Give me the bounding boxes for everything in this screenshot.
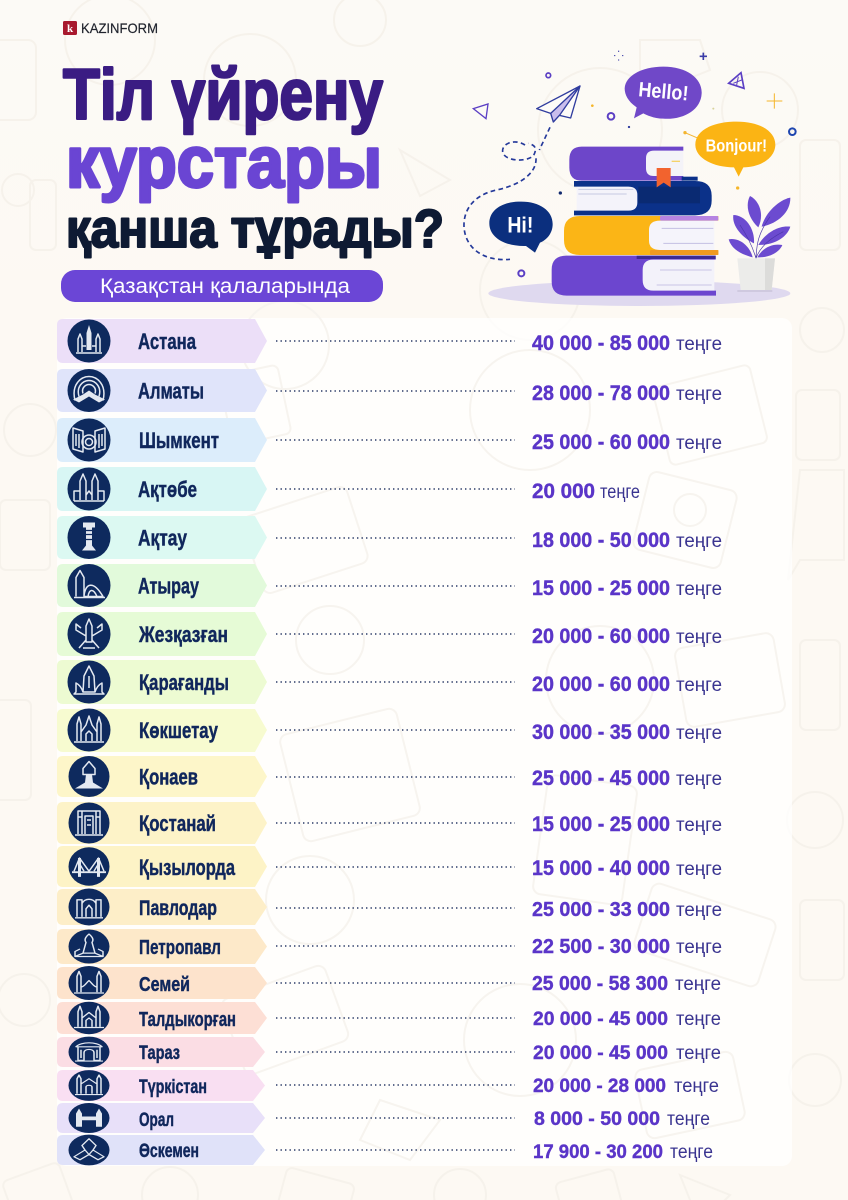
row: Петропавл: теңге bbox=[676, 937, 722, 958]
row: Қонаев: теңге bbox=[676, 769, 722, 790]
row: Павлодар: теңге bbox=[676, 900, 722, 921]
row: Өскемен: 17 900 - 30 200 bbox=[533, 1141, 663, 1163]
icon: Ақтөбе bbox=[68, 468, 110, 510]
icon: Тараз bbox=[68, 1037, 110, 1067]
bubble: Hello: Hello! bbox=[638, 78, 689, 105]
bubble: Bonjour: Bonjour! bbox=[706, 136, 767, 156]
title: Тіл үйрену bbox=[63, 56, 383, 135]
row: Атырау: теңге bbox=[676, 579, 722, 600]
row: Өскемен: теңге bbox=[670, 1142, 713, 1163]
decorative shapes bbox=[473, 73, 744, 119]
row: Шымкент: теңге bbox=[676, 433, 722, 454]
icon: Петропавл bbox=[68, 929, 110, 964]
bubble: Hello bbox=[625, 67, 702, 119]
row: Тараз: теңге bbox=[676, 1043, 721, 1064]
row: Талдыкорған: теңге bbox=[676, 1009, 721, 1030]
row: Ақтөбе: Ақтөбе bbox=[138, 477, 197, 502]
row: Астана bbox=[57, 319, 722, 363]
title: қанша тұрады? bbox=[66, 199, 444, 259]
row: Жезқазған: теңге bbox=[676, 627, 722, 648]
row: Қонаев: Қонаев bbox=[139, 764, 198, 790]
bookmark bbox=[657, 168, 671, 187]
icon: Қонаев bbox=[68, 756, 110, 797]
row: Астана: 40 000 - 85 000 bbox=[532, 332, 670, 355]
bubble: Hi bbox=[489, 202, 553, 253]
icon: Атырау bbox=[68, 564, 110, 607]
row: Жезқазған bbox=[57, 612, 722, 656]
row: Атырау: 15 000 - 25 000 bbox=[532, 577, 670, 600]
row: Көкшетау: 30 000 - 35 000 bbox=[532, 721, 670, 744]
illustration: books and speech bubbles bbox=[464, 51, 796, 306]
bubble: Bonjour bbox=[683, 122, 775, 177]
row: Қостанай bbox=[57, 802, 722, 844]
row: Қостанай: Қостанай bbox=[139, 811, 216, 836]
row: Ақтау: 18 000 - 50 000 bbox=[532, 529, 670, 552]
row: Алматы bbox=[57, 369, 722, 412]
row: Астана: Астана bbox=[138, 329, 197, 354]
row: Қонаев bbox=[57, 756, 722, 797]
row: Семей: Семей bbox=[139, 973, 190, 996]
title: курстары bbox=[66, 123, 382, 203]
icon: Семей bbox=[68, 966, 110, 1000]
row: Орал: Орал bbox=[139, 1109, 174, 1131]
icon: Көкшетау bbox=[68, 708, 110, 752]
row: Түркістан: 20 000 - 28 000 bbox=[533, 1075, 666, 1097]
book: top purple bbox=[569, 147, 698, 181]
row: Павлодар bbox=[57, 889, 722, 925]
row: Шымкент: Шымкент bbox=[139, 428, 219, 453]
row: Талдыкорған: Талдыкорған bbox=[139, 1009, 236, 1031]
row: Қызылорда: Қызылорда bbox=[139, 855, 236, 880]
icon: Қостанай bbox=[68, 802, 110, 844]
row: Петропавл bbox=[57, 929, 722, 964]
row: Түркістан: теңге bbox=[674, 1076, 719, 1097]
row: Қарағанды: 20 000 - 60 000 bbox=[532, 673, 670, 696]
bubble: Hi: Hi! bbox=[507, 212, 533, 237]
row: Орал: 8 000 - 50 000 bbox=[534, 1108, 660, 1130]
row: Қызылорда: 15 000 - 40 000 bbox=[532, 857, 670, 880]
icon: potted plant bbox=[729, 196, 790, 292]
row: Семей: 25 000 - 58 300 bbox=[532, 973, 668, 995]
row: Өскемен: Өскемен bbox=[139, 1141, 199, 1162]
row: Ақтөбе: 20 000 bbox=[532, 480, 595, 503]
subtitle pill: Қазақстан қалаларында bbox=[100, 275, 350, 298]
row: Ақтөбе: теңге bbox=[600, 482, 640, 503]
icon: Алматы bbox=[68, 369, 110, 412]
row: Алматы: 28 000 - 78 000 bbox=[532, 382, 670, 405]
row: Қонаев: 25 000 - 45 000 bbox=[532, 767, 670, 790]
icon: Түркістан bbox=[68, 1070, 110, 1101]
logo: Kazinform: KAZINFORM bbox=[81, 20, 158, 36]
row: Қызылорда: теңге bbox=[676, 859, 722, 880]
row: Ақтау: Ақтау bbox=[138, 526, 188, 550]
row: Тараз: Тараз bbox=[139, 1042, 180, 1064]
row: Көкшетау: теңге bbox=[676, 723, 722, 744]
row: Атырау bbox=[57, 564, 722, 607]
icon: Астана bbox=[68, 320, 110, 362]
row: Түркістан bbox=[57, 1070, 719, 1101]
row: Атырау: Атырау bbox=[138, 574, 200, 598]
book: yellow bbox=[564, 216, 718, 255]
row: Өскемен bbox=[57, 1135, 713, 1165]
row: Талдыкорған bbox=[57, 1002, 721, 1034]
row: Қарағанды: Қарағанды bbox=[139, 670, 229, 695]
dashed flight path bbox=[464, 127, 550, 260]
icon: Қызылорда bbox=[68, 847, 110, 886]
row: Қостанай: 15 000 - 25 000 bbox=[532, 813, 670, 836]
row: Алматы: теңге bbox=[676, 384, 722, 405]
row: Қостанай: теңге bbox=[676, 815, 722, 836]
row: Қызылорда bbox=[57, 846, 722, 887]
icon: Орал bbox=[68, 1103, 110, 1133]
row: Қарағанды bbox=[57, 660, 722, 704]
icon: Павлодар bbox=[68, 889, 110, 925]
icon: Өскемен bbox=[68, 1135, 110, 1165]
row: Ақтөбе bbox=[57, 467, 640, 511]
icon: Қарағанды bbox=[68, 660, 110, 704]
row: Тараз bbox=[57, 1037, 721, 1067]
subtitle pill bbox=[61, 270, 383, 302]
icon: Жезқазған bbox=[68, 612, 110, 656]
row: Тараз: 20 000 - 45 000 bbox=[533, 1042, 668, 1064]
row: Алматы: Алматы bbox=[138, 378, 204, 404]
row: Павлодар: Павлодар bbox=[139, 897, 217, 920]
icon: Шымкент bbox=[68, 418, 110, 462]
row: Жезқазған: 20 000 - 60 000 bbox=[532, 625, 670, 648]
icon: Талдыкорған bbox=[68, 1002, 110, 1034]
row: Шымкент: 25 000 - 60 000 bbox=[532, 431, 670, 454]
row: Түркістан: Түркістан bbox=[139, 1076, 207, 1098]
content backdrop panel bbox=[57, 301, 792, 1166]
icon: Ақтау bbox=[68, 516, 110, 559]
row: Орал bbox=[57, 1103, 710, 1133]
row: Петропавл: 22 500 - 30 000 bbox=[532, 935, 670, 958]
book: bottom purple bbox=[552, 256, 716, 296]
row: Жезқазған: Жезқазған bbox=[138, 622, 228, 647]
row: Қарағанды: теңге bbox=[676, 675, 722, 696]
row: Ақтау bbox=[57, 516, 722, 559]
row: Көкшетау bbox=[57, 708, 722, 752]
row: Орал: теңге bbox=[667, 1109, 710, 1130]
logo: Kazinform: k bbox=[67, 23, 74, 35]
title bbox=[63, 56, 444, 259]
row: Петропавл: Петропавл bbox=[139, 936, 221, 959]
row: Шымкент bbox=[57, 418, 722, 462]
row: Семей: теңге bbox=[675, 974, 721, 995]
row: Павлодар: 25 000 - 33 000 bbox=[532, 898, 670, 921]
row: Талдыкорған: 20 000 - 45 000 bbox=[533, 1008, 668, 1030]
icon: paper plane bbox=[537, 86, 580, 122]
row: Астана: теңге bbox=[676, 334, 722, 355]
row: Көкшетау: Көкшетау bbox=[139, 718, 219, 743]
row: Ақтау: теңге bbox=[676, 531, 722, 552]
row: Семей bbox=[57, 966, 721, 1000]
book: navy bbox=[574, 181, 712, 215]
